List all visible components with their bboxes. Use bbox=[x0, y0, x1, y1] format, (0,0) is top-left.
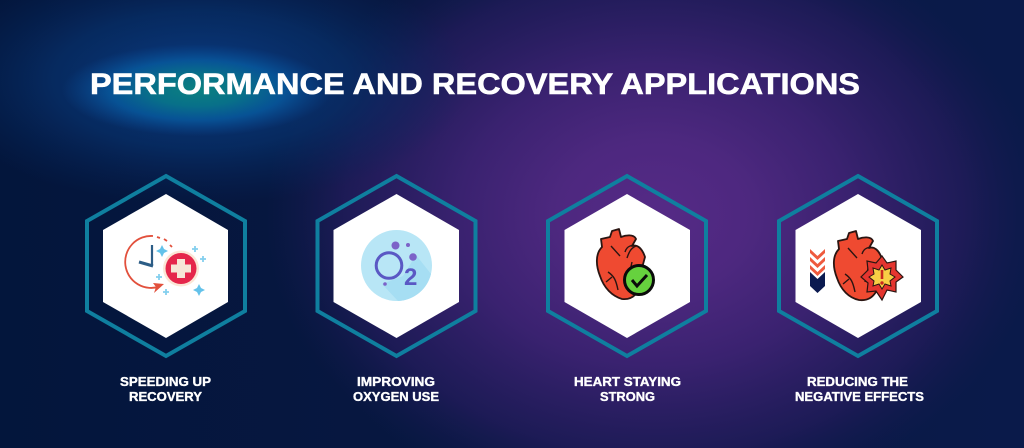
icon: clock with medical cross bbox=[125, 236, 206, 296]
label: reducing the negative effects: REDUCING THE bbox=[807, 375, 908, 389]
title: PERFORMANCE AND RECOVERY APPLICATIONS bbox=[90, 68, 860, 101]
panel: speeding up recovery bbox=[87, 176, 245, 356]
label: heart staying strong bbox=[574, 375, 681, 404]
icon: heart with warning burst bbox=[834, 231, 903, 300]
label: improving oxygen use bbox=[353, 375, 439, 404]
white hexagon bbox=[564, 194, 690, 338]
white hexagon bbox=[796, 194, 921, 338]
hexagon frame bbox=[548, 176, 706, 356]
icon: oxygen molecule bbox=[361, 230, 432, 301]
hexagon frame bbox=[87, 176, 245, 356]
panel: improving oxygen use bbox=[318, 176, 476, 356]
white hexagon bbox=[103, 194, 228, 338]
icon: heart with check mark bbox=[597, 229, 654, 299]
icon: down chevrons bbox=[810, 249, 825, 293]
panel: reducing the negative effects bbox=[779, 176, 937, 356]
hexagon frame bbox=[318, 176, 476, 356]
label: speeding up recovery: SPEEDING UP bbox=[120, 375, 211, 389]
icon: oxygen molecule: 2 bbox=[404, 264, 417, 291]
white hexagon bbox=[334, 194, 459, 338]
label: speeding up recovery: RECOVERY bbox=[129, 390, 203, 404]
label: reducing the negative effects bbox=[795, 375, 924, 404]
label: heart staying strong: HEART STAYING bbox=[574, 375, 681, 389]
hexagon frame bbox=[779, 176, 937, 356]
label: improving oxygen use: IMPROVING bbox=[357, 375, 435, 389]
label: speeding up recovery bbox=[120, 375, 211, 404]
label: improving oxygen use: OXYGEN USE bbox=[353, 390, 439, 404]
panel: heart staying strong bbox=[548, 176, 706, 356]
label: reducing the negative effects: NEGATIVE EFFECTS bbox=[795, 390, 924, 404]
label: heart staying strong: STRONG bbox=[600, 390, 655, 404]
